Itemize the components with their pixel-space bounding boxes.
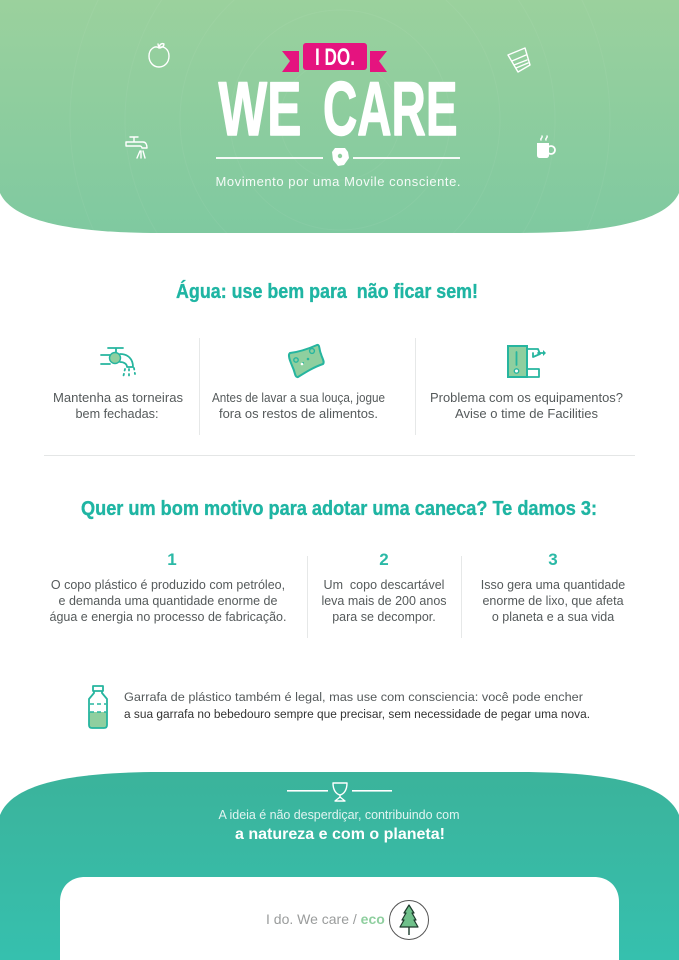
heading: mug: Quer um bom motivo para adotar uma caneca? Te damos 3: — [81, 498, 597, 520]
icon: sponge — [289, 345, 324, 377]
brand line: I do. We care / eco — [266, 911, 385, 927]
reason 3: o planeta e a sua vida — [492, 610, 614, 624]
icon: coffee mug — [537, 136, 555, 158]
footer emphasis: a natureza e com o planeta! — [235, 826, 445, 843]
logo ribbon: I do. — [282, 43, 387, 72]
tip 1: faucets: bem fechadas: — [76, 407, 158, 421]
tip 2: dishes: fora os restos de alimentos. — [219, 407, 378, 421]
reason 2: Um copo descartável — [324, 578, 444, 592]
icon: bottle — [89, 686, 107, 728]
callout: bottle: a sua garrafa no bebedouro sempre que precisar, sem necessidade de pegar uma nova. — [124, 707, 590, 721]
reason 2 — [321, 550, 447, 624]
reason 3: 3 — [548, 550, 558, 569]
tip 1: faucets — [53, 348, 183, 421]
reason 2: leva mais de 200 anos — [321, 594, 447, 608]
icon: water dispenser — [508, 346, 546, 377]
panel: three reasons — [50, 550, 625, 638]
logo ribbon: I do.: I DO. — [315, 44, 355, 71]
icon: trophy divider — [287, 783, 392, 801]
reason 1: 1 — [167, 550, 177, 569]
reason 2: 2 — [379, 550, 389, 569]
panel: header — [0, 0, 679, 390]
tip 3: equipment: Problema com os equipamentos? — [430, 391, 623, 405]
icon: dripping faucet — [101, 348, 135, 378]
icon: faucet — [126, 137, 147, 158]
icon: apple — [149, 44, 169, 67]
tip 3: equipment: Avise o time de Facilities — [455, 407, 598, 421]
icon: plastic cup — [508, 48, 530, 72]
reason 1: O copo plástico é produzido com petróleo, — [51, 578, 285, 592]
reason 1: e demanda uma quantidade enorme de — [59, 594, 277, 608]
reason 3: enorme de lixo, que afeta — [482, 594, 624, 608]
reason 3: Isso gera uma quantidade — [481, 578, 625, 592]
subtitle: Movimento por uma Movile consciente. — [216, 174, 460, 189]
tip 1: faucets: Mantenha as torneiras — [53, 391, 183, 405]
heading: water: Água: use bem para não ficar sem! — [176, 280, 478, 303]
panel: water tips — [53, 338, 623, 435]
callout: bottle: Garrafa de plástico também é legal, mas use com consciencia: você pode encher — [124, 690, 583, 704]
tip 2: dishes — [212, 345, 385, 421]
panel: footer — [0, 772, 679, 960]
divider with hand icon — [216, 148, 460, 166]
title: WE CARE: CARE — [323, 67, 458, 152]
title: WE CARE: WE — [218, 67, 302, 152]
tip 2: dishes: Antes de lavar a sua louça, jogue — [212, 391, 385, 405]
reason 3 — [481, 550, 625, 624]
icon: tree badge — [390, 900, 428, 940]
reason 2: para se decompor. — [332, 610, 436, 624]
tip 3: equipment — [430, 346, 623, 421]
footer text: A ideia é não desperdiçar, contribuindo com — [218, 808, 460, 822]
reason 1 — [50, 550, 286, 624]
reason 1: água e energia no processo de fabricação. — [50, 610, 286, 624]
panel: white card — [60, 877, 619, 960]
callout: bottle — [89, 686, 590, 728]
